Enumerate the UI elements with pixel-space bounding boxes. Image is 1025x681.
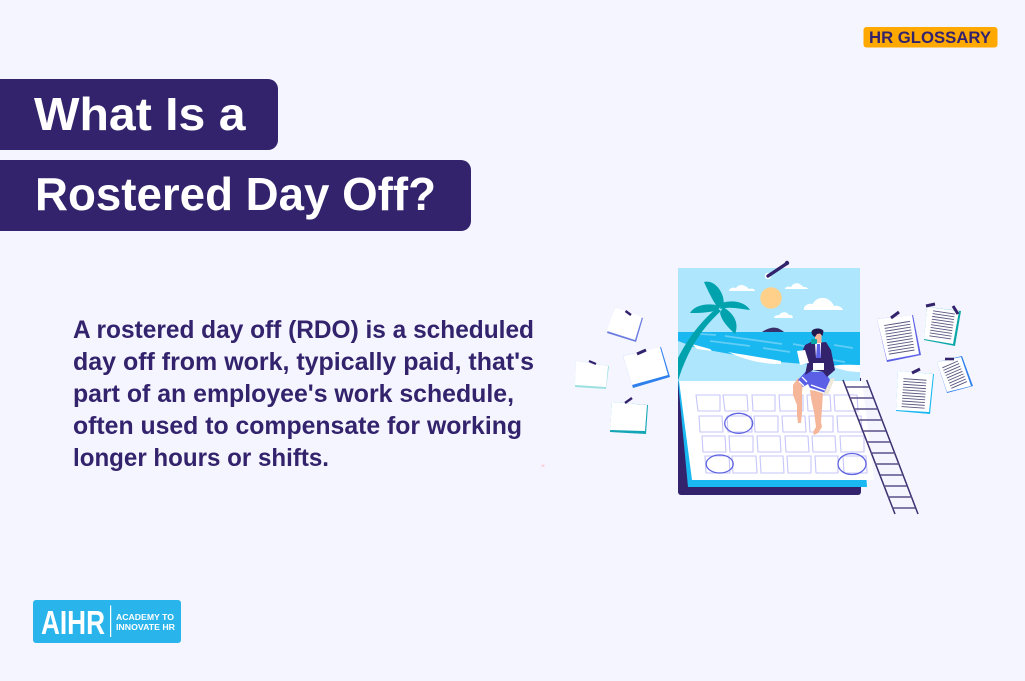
logo: AIHR: ACADEMY TO — [116, 613, 174, 622]
badge: HR Glossary: HR GLOSSARY — [869, 28, 992, 47]
calendar grid — [696, 395, 867, 473]
note 3 — [575, 361, 609, 389]
document pages: right cluster — [877, 304, 973, 414]
note 4 — [610, 398, 648, 434]
beach picture — [678, 268, 860, 381]
note 1 — [607, 307, 643, 342]
sun — [760, 287, 782, 309]
definition text block: often used to compensate for working — [73, 412, 522, 440]
document 4 — [937, 356, 973, 393]
document 2 — [924, 304, 961, 346]
title line 2: Rostered Day Off? — [35, 168, 436, 220]
title line 1: What Is a — [34, 88, 246, 140]
calendar backing — [678, 378, 861, 495]
definition text block: A rostered day off (RDO) is a scheduled — [73, 316, 534, 344]
pin — [765, 261, 789, 279]
title line 2 — [0, 160, 471, 231]
calendar blue page — [678, 381, 867, 487]
document 1 — [877, 312, 921, 362]
title line 1 — [0, 79, 278, 150]
person sitting on calendar — [793, 328, 835, 435]
title — [0, 79, 471, 231]
definition text block: part of an employee's work schedule, — [73, 380, 514, 408]
island — [762, 328, 784, 332]
logo: AIHR: AIHR — [41, 604, 105, 641]
definition text block: day off from work, typically paid, that's — [73, 348, 534, 376]
ladder — [843, 380, 918, 514]
note 2 — [623, 347, 670, 388]
logo: AIHR — [33, 600, 181, 643]
definition text block: longer hours or shifts. — [73, 444, 329, 472]
sticky notes: left cluster — [575, 307, 670, 434]
circled dates — [706, 413, 866, 474]
document 3 — [896, 369, 934, 414]
clouds — [729, 283, 843, 318]
palm tree — [678, 282, 750, 381]
definition text block — [73, 316, 534, 472]
calendar white page — [679, 381, 874, 480]
logo: AIHR: INNOVATE HR — [116, 623, 175, 632]
illustration: calendar with beach scene — [575, 261, 973, 514]
